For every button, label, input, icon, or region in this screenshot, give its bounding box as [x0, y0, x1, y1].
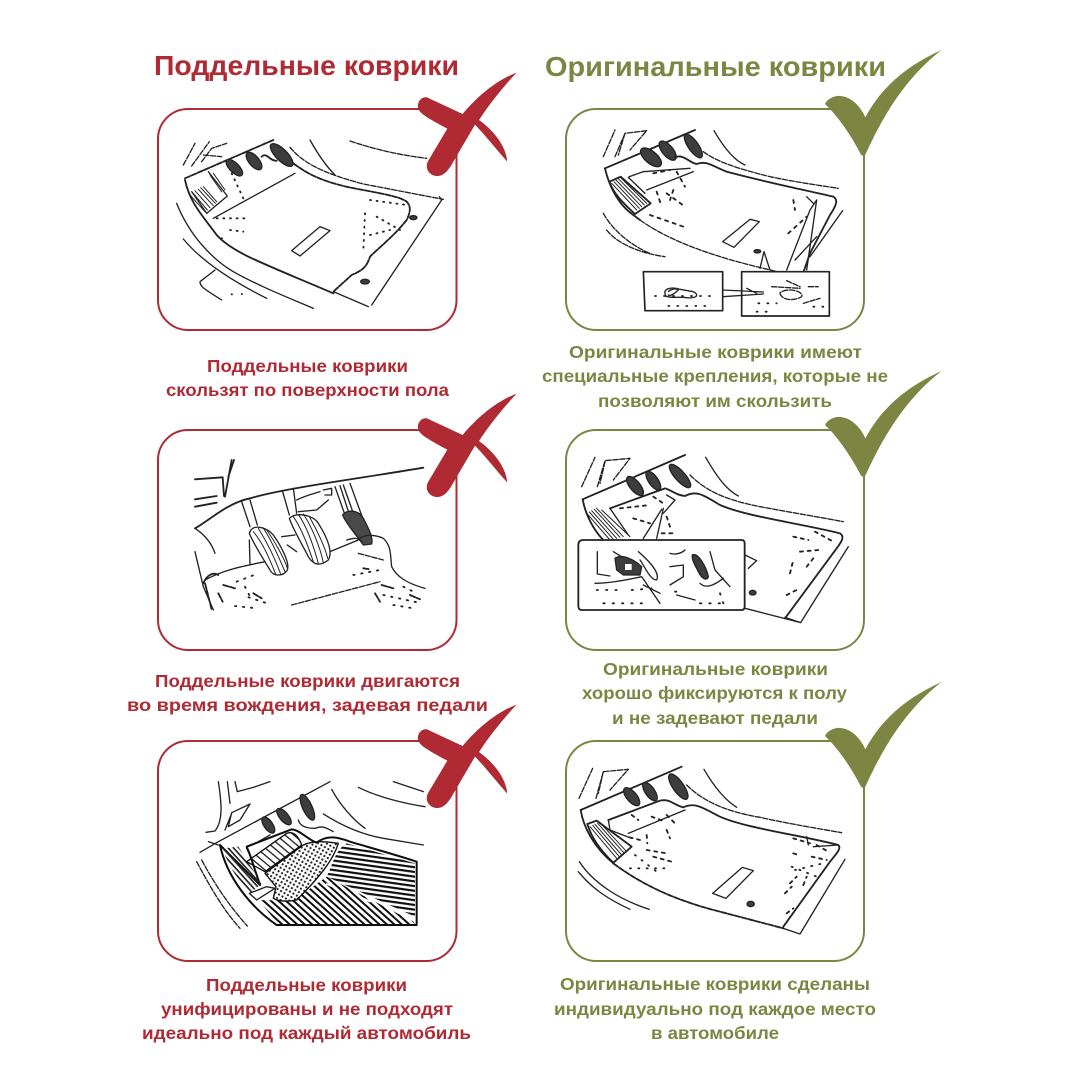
caption: Поддельные коврики [206, 975, 407, 995]
illustration: floor with fastener insets [603, 130, 843, 316]
caption: в автомобиле [651, 1023, 779, 1043]
icon: green check [825, 371, 942, 477]
card frame [566, 741, 864, 961]
illustration: floor with pedal inset [578, 455, 848, 623]
card frame [158, 109, 456, 330]
caption: идеально под каждый автомобиль [142, 1023, 471, 1043]
card frame [566, 109, 864, 330]
card frame [158, 430, 456, 650]
panel: original mats custom made [554, 682, 942, 1043]
panel: fake mats move while driving [127, 394, 517, 715]
caption [554, 974, 876, 1043]
caption: индивидуально под каждое место [554, 999, 876, 1019]
title: original mats: Оригинальные коврики [545, 51, 886, 82]
caption: унифицированы и не подходят [161, 999, 453, 1019]
illustration: pedals catching mat [195, 460, 425, 610]
panel: original mats have fasteners [542, 50, 942, 411]
caption: Оригинальные коврики [603, 659, 828, 679]
icon: green check [825, 50, 942, 156]
caption [142, 975, 471, 1043]
caption: Поддельные коврики [207, 356, 408, 376]
caption: скользят по поверхности пола [166, 380, 449, 400]
illustration: floor with plain mat [177, 140, 443, 308]
card frame [158, 741, 456, 961]
caption: во время вождения, задевая педали [127, 695, 488, 715]
card frame [566, 430, 864, 650]
caption: и не задевают педали [612, 708, 818, 728]
illustration: floor with custom mat [578, 767, 845, 934]
caption: Оригинальные коврики сделаны [560, 974, 870, 994]
panel: fake mats are universal [142, 705, 517, 1043]
caption: Поддельные коврики двигаются [155, 671, 460, 691]
title: fake mats: Поддельные коврики [154, 50, 459, 81]
illustration: universal ribbed mat [197, 782, 425, 928]
icon: red cross [418, 73, 517, 176]
caption: специальные крепления, которые не [542, 366, 888, 386]
caption [582, 659, 847, 728]
caption [542, 342, 888, 411]
ribbed mat body [220, 829, 417, 925]
icon: green check [825, 682, 942, 788]
caption: позволяют им скользить [598, 391, 832, 411]
caption [127, 671, 488, 715]
caption [166, 356, 449, 400]
icon: red cross [418, 394, 517, 497]
caption: Оригинальные коврики имеют [569, 342, 862, 362]
icon: red cross [418, 705, 517, 808]
panel: fake mats slide [158, 73, 517, 400]
caption: хорошо фиксируются к полу [582, 683, 847, 703]
panel: original mats fixed to floor [566, 371, 942, 728]
